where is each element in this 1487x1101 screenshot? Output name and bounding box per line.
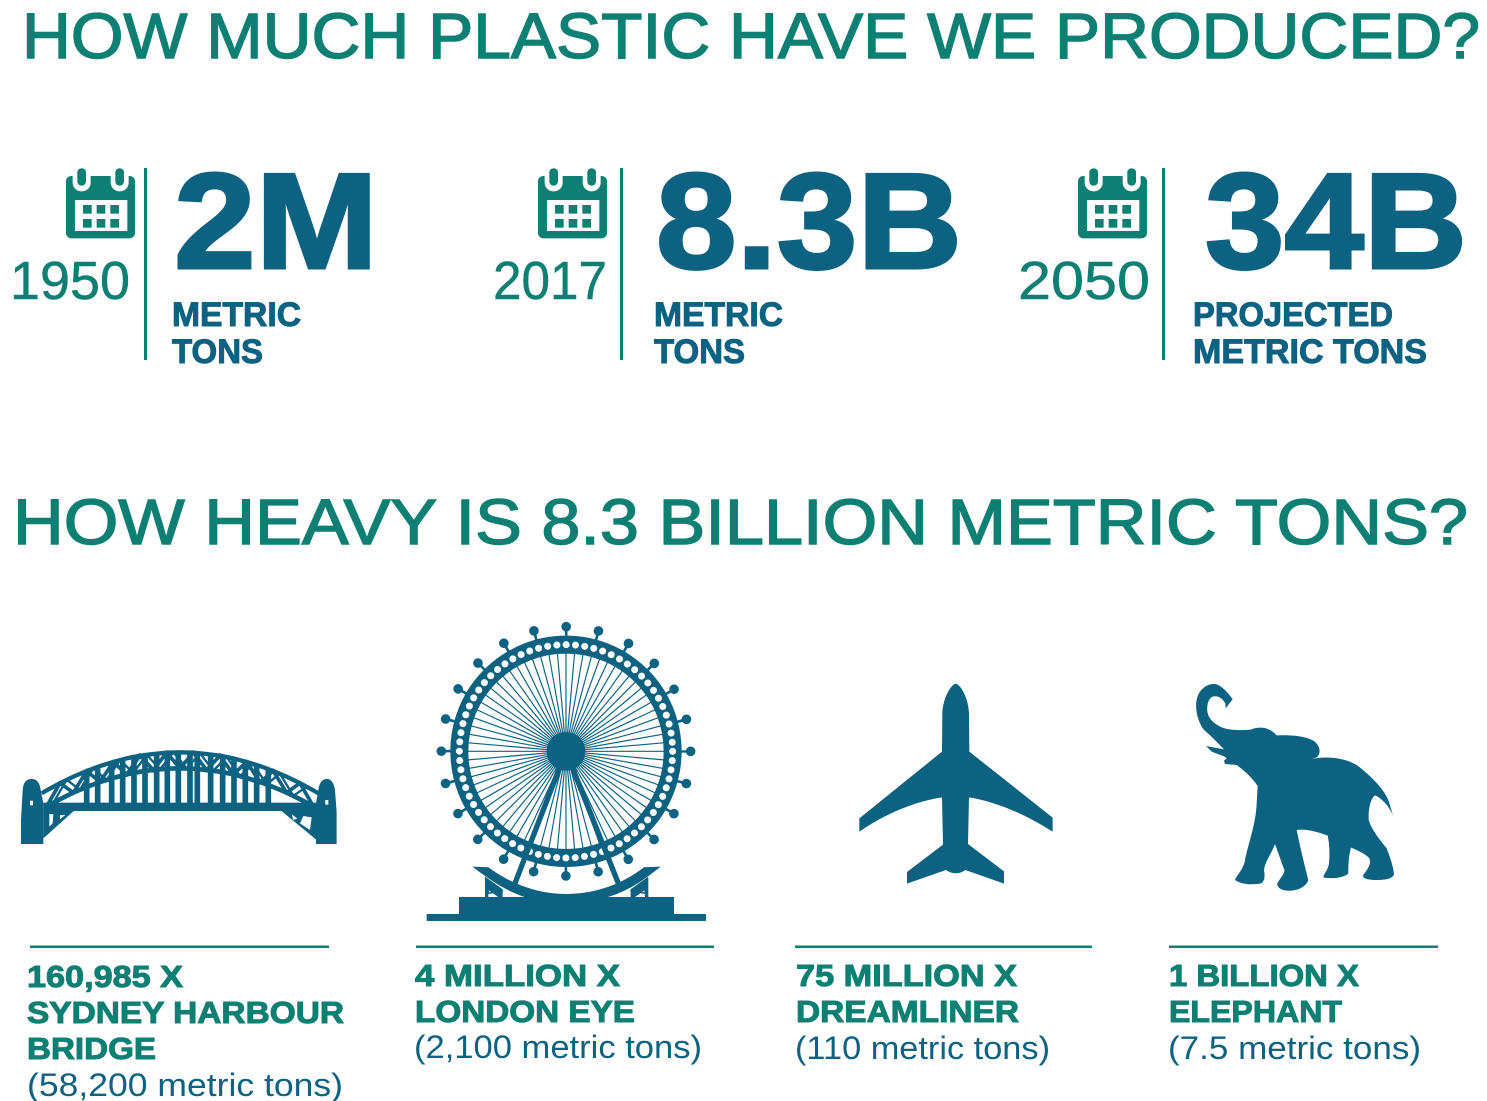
- caption: dreamliner: [795, 946, 1092, 1066]
- caption: london eye: (2,100 metric tons): [414, 1029, 702, 1065]
- unit: projected metric tons: METRIC TONS: [1193, 333, 1427, 371]
- icon: dreamliner plane: [859, 684, 1053, 884]
- icon: calendar 1950: [66, 167, 135, 238]
- unit: metric tons: TONS: [654, 333, 745, 371]
- rim: [459, 645, 673, 858]
- heading: how much plastic: HOW MUCH PLASTIC HAVE WE PRODUCED?: [22, 0, 1480, 72]
- unit: metric tons: METRIC: [654, 296, 783, 334]
- base and cradle: [427, 867, 706, 921]
- value 2M: 2M: [174, 145, 378, 297]
- caption: sydney harbour bridge: 160,985 X: [27, 959, 183, 994]
- unit: metric tons: TONS: [172, 333, 263, 371]
- panel: 2017 stat: [493, 145, 962, 371]
- year 1950: 1950: [10, 251, 130, 311]
- year 2017: 2017: [493, 251, 607, 311]
- caption: elephant: [1168, 946, 1438, 1066]
- caption: sydney harbour bridge: [27, 946, 344, 1101]
- icon: elephant: [1196, 684, 1394, 891]
- caption: elephant: 1 BILLION X: [1169, 958, 1359, 993]
- panel: 2050 stat: [1018, 145, 1467, 371]
- unit: projected metric tons: [1193, 296, 1427, 371]
- caption: london eye: 4 MILLION X: [415, 958, 620, 993]
- divider 2050: [1162, 168, 1165, 360]
- pods and stems: [446, 631, 686, 871]
- unit: metric tons: [172, 296, 301, 371]
- unit: metric tons: [654, 296, 783, 371]
- caption: sydney harbour bridge: BRIDGE: [27, 1031, 156, 1066]
- legs: [514, 767, 619, 885]
- unit: metric tons: METRIC: [172, 296, 301, 334]
- spokes: [468, 653, 664, 849]
- caption: london eye: [414, 946, 714, 1065]
- icon: calendar 2050: [1078, 167, 1147, 238]
- caption: dreamliner: 75 MILLION X: [796, 958, 1017, 993]
- icon: london eye: [427, 627, 706, 921]
- unit: projected metric tons: PROJECTED: [1193, 296, 1393, 334]
- caption: london eye: LONDON EYE: [415, 994, 635, 1029]
- caption: elephant: (7.5 metric tons): [1168, 1030, 1421, 1066]
- caption: elephant: ELEPHANT: [1169, 994, 1342, 1029]
- hub: [547, 732, 585, 771]
- value 8.3B: 8.3B: [656, 145, 962, 297]
- year 2050: 2050: [1018, 251, 1150, 311]
- panel: 1950 stat: [10, 145, 378, 371]
- bridge deck and towers: [21, 779, 337, 844]
- value 34B: 34B: [1205, 145, 1467, 297]
- caption: dreamliner: (110 metric tons): [795, 1030, 1050, 1066]
- icon: calendar 2017: [538, 167, 607, 238]
- icon: sydney harbour bridge: [21, 752, 337, 844]
- caption: dreamliner: DREAMLINER: [796, 994, 1019, 1029]
- heading: how heavy: HOW HEAVY IS 8.3 BILLION METRIC TONS?: [13, 486, 1468, 558]
- caption: sydney harbour bridge: SYDNEY HARBOUR: [27, 995, 344, 1030]
- divider 2017: [620, 168, 623, 360]
- divider 1950: [144, 168, 147, 360]
